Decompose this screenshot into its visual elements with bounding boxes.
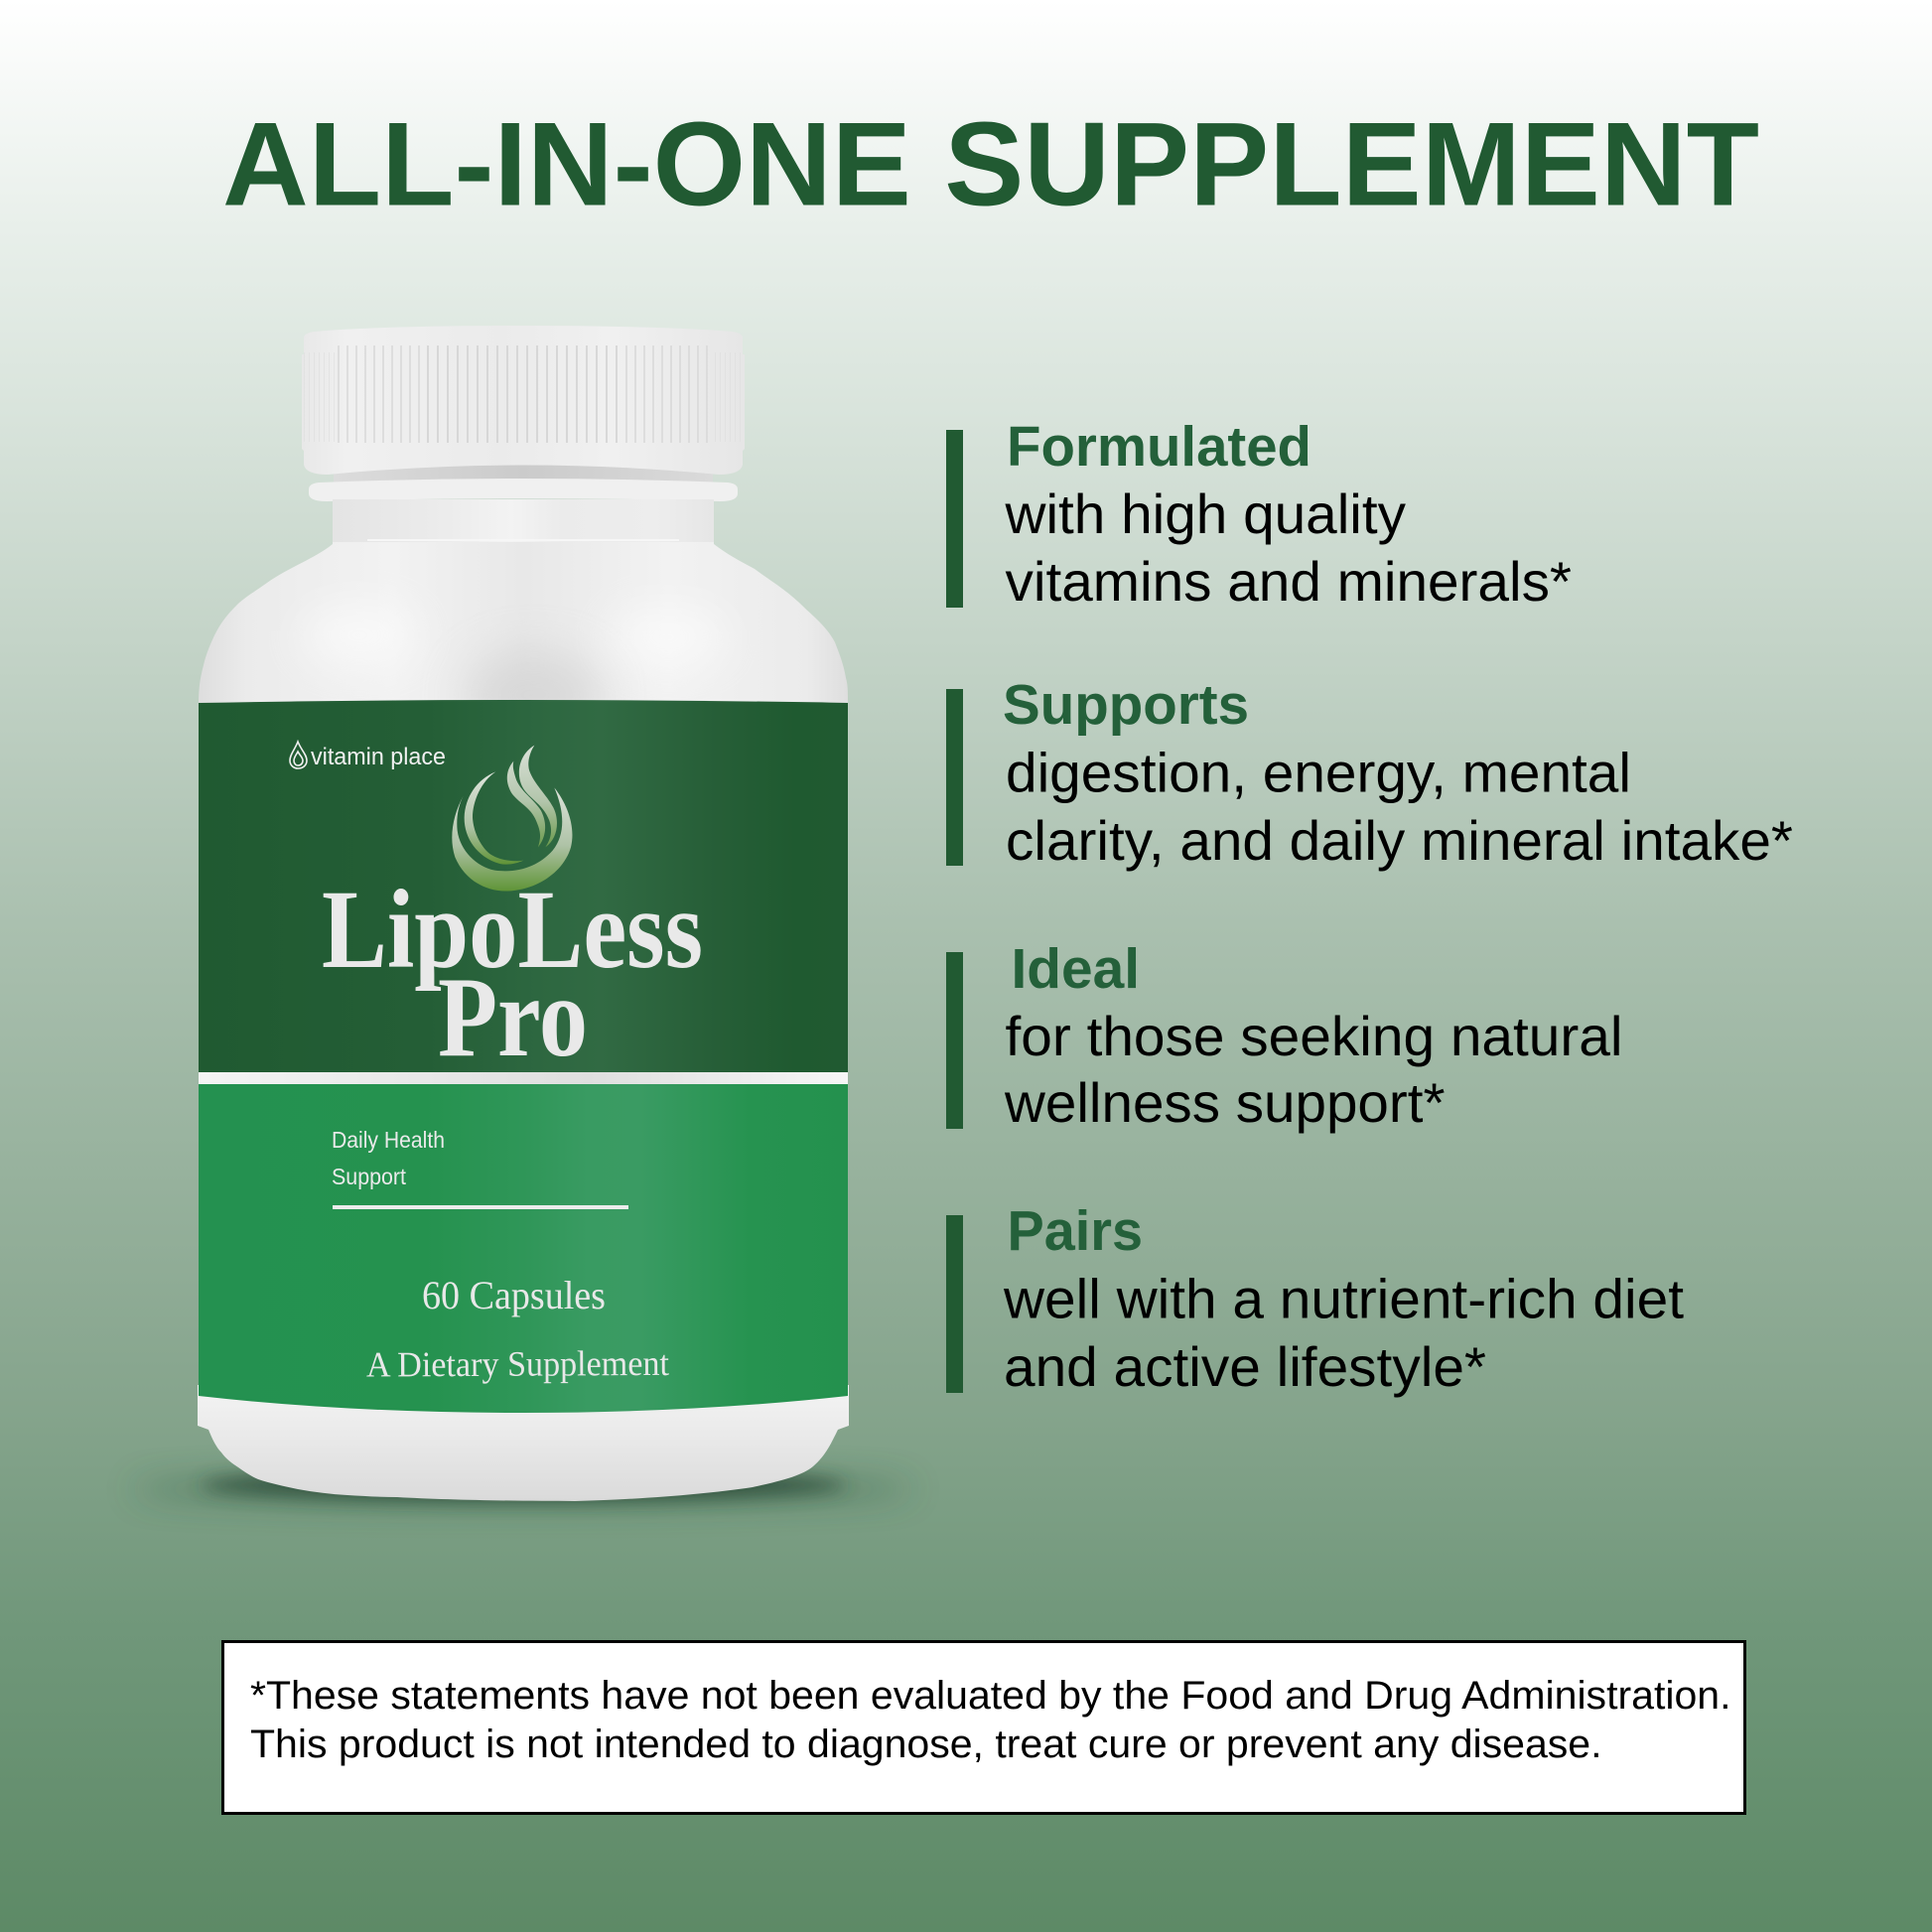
heading: Ideal bbox=[1011, 937, 1140, 1001]
icon: vitamin place droplet bbox=[290, 742, 307, 768]
heading: Supports bbox=[1003, 673, 1249, 737]
label rule bbox=[333, 1205, 628, 1209]
line 1: digestion, energy, mental bbox=[1006, 741, 1631, 804]
brand: vitamin place: vitamin place bbox=[311, 744, 446, 770]
light green label panel bbox=[199, 1084, 848, 1413]
label white stripe bbox=[199, 1072, 848, 1084]
benefit: Formulated bbox=[946, 415, 1572, 613]
bottle neck ring bbox=[309, 479, 738, 501]
benefit: Ideal bbox=[946, 937, 1622, 1134]
heading: Pairs bbox=[1007, 1199, 1143, 1263]
line 2: wellness support* bbox=[1004, 1071, 1446, 1134]
disclaimer line 2: This product is not intended to diagnose, treat cure or prevent any disease. bbox=[250, 1723, 1602, 1766]
product name: Pro: Pro bbox=[438, 954, 588, 1081]
bottle shoulder bbox=[199, 499, 848, 703]
line 1: for those seeking natural bbox=[1005, 1005, 1622, 1067]
product name: LipoLess: LipoLess bbox=[322, 868, 703, 992]
benefit: Supports bbox=[946, 673, 1793, 872]
disclaimer line 1: *These statements have not been evaluated by the Food and Drug Administration. bbox=[250, 1674, 1731, 1718]
bottle ground shadow bbox=[131, 1470, 915, 1501]
title: ALL-IN-ONE SUPPLEMENT bbox=[222, 97, 1759, 230]
bottle cap bbox=[302, 326, 745, 475]
dark green label panel bbox=[199, 700, 848, 1072]
label: 60 Capsules: 60 Capsules bbox=[422, 1273, 606, 1317]
accent bar bbox=[946, 1215, 963, 1393]
line 2: and active lifestyle* bbox=[1004, 1335, 1486, 1398]
line 1: well with a nutrient-rich diet bbox=[1003, 1267, 1684, 1330]
accent bar bbox=[946, 430, 963, 608]
box frame bbox=[222, 1642, 1745, 1813]
icon: flame logo bbox=[452, 746, 572, 892]
label: Daily Health: Daily Health bbox=[332, 1127, 445, 1153]
accent bar bbox=[946, 689, 963, 866]
bottle base bbox=[198, 1385, 849, 1501]
label: A Dietary Supplement: A Dietary Supplement bbox=[366, 1343, 669, 1384]
product bottle bbox=[131, 326, 915, 1501]
disclaimer box bbox=[222, 1642, 1745, 1813]
bottle neck gap bbox=[334, 459, 713, 483]
accent bar bbox=[946, 952, 963, 1129]
heading: Formulated bbox=[1007, 415, 1311, 479]
line 2: clarity, and daily mineral intake* bbox=[1006, 809, 1793, 872]
label: Support: Support bbox=[332, 1164, 407, 1189]
line 1: with high quality bbox=[1004, 483, 1406, 545]
benefit: Pairs bbox=[946, 1199, 1684, 1398]
line 2: vitamins and minerals* bbox=[1005, 550, 1572, 613]
